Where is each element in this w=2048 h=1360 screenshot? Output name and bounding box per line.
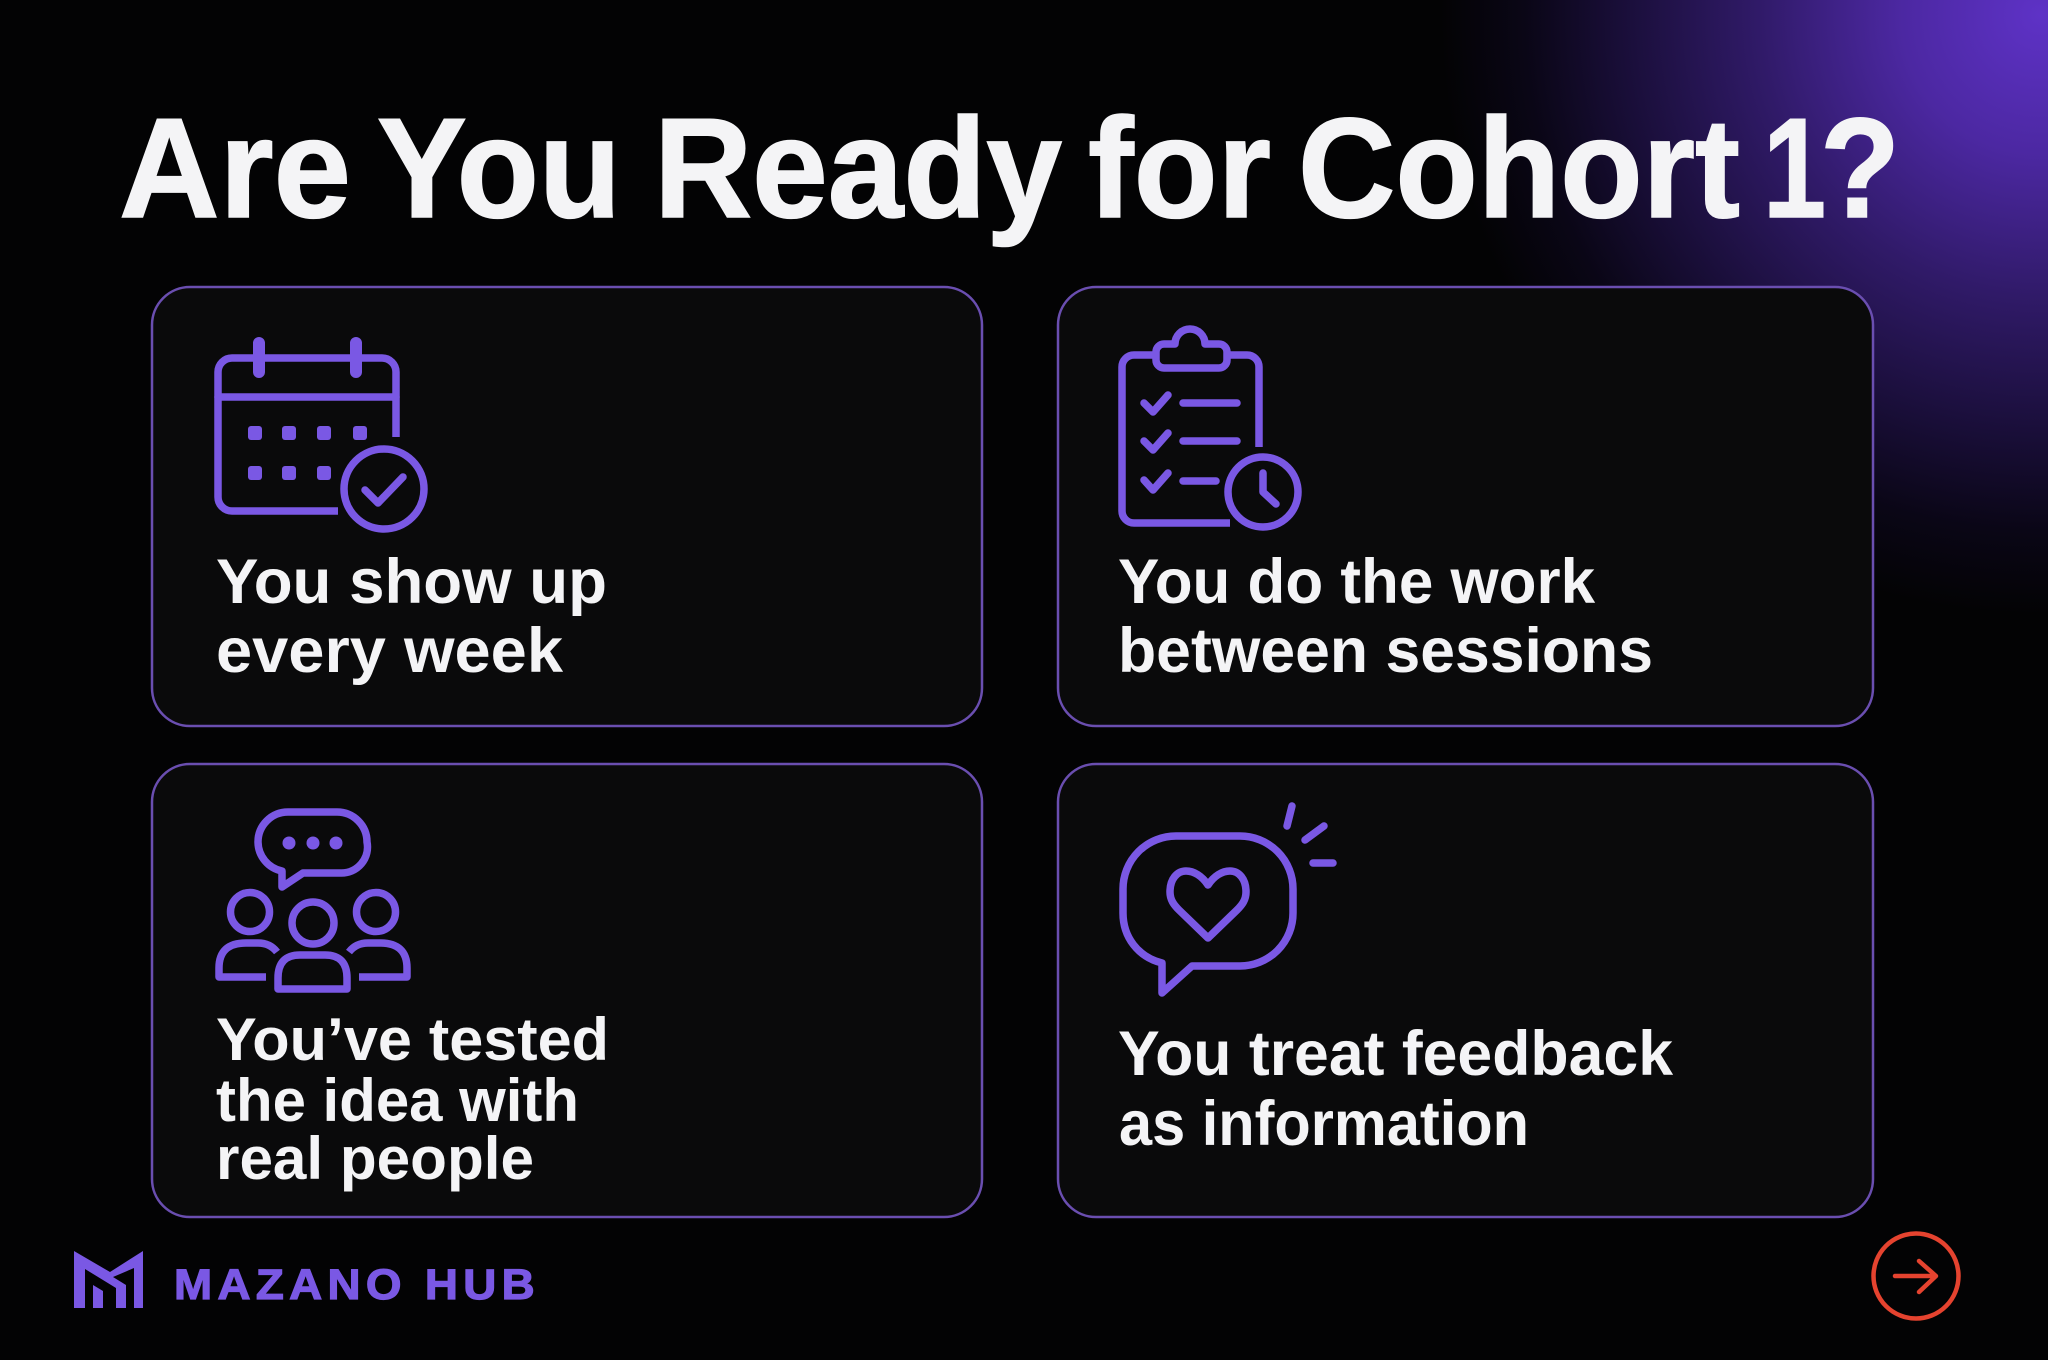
text: every week: every week	[216, 616, 564, 686]
wordmark: MAZANO HUB	[174, 1261, 540, 1309]
title: You	[377, 89, 621, 248]
panel: do the work	[1058, 287, 1873, 726]
title: Cohort	[1298, 89, 1740, 248]
title: ?	[1820, 89, 1900, 248]
logo: Mazano Hub	[74, 1251, 540, 1309]
text: treat feedback: You treat feedback	[1118, 1019, 1674, 1089]
text: idea with: the idea with	[216, 1067, 579, 1134]
text: do the work: You do the work	[1118, 547, 1596, 617]
icon: group with speech bubble	[219, 812, 407, 989]
title	[119, 89, 1900, 248]
arrow button	[1874, 1234, 1958, 1318]
text: as information: as information	[1119, 1089, 1529, 1159]
title: 1	[1763, 89, 1826, 248]
panel: treat feedback	[1058, 764, 1873, 1217]
icon: clipboard with clock	[1122, 329, 1298, 527]
title: Ready	[654, 89, 1062, 248]
panel: show up every week	[152, 287, 982, 726]
icon: calendar with check	[218, 343, 424, 529]
title: for	[1088, 89, 1271, 248]
text: tested: You’ve tested	[216, 1006, 609, 1073]
text: real people: real people	[216, 1125, 534, 1192]
text: between sessions: between sessions	[1118, 616, 1653, 686]
panel: tested the idea	[152, 764, 982, 1217]
title: Are	[119, 89, 351, 248]
logo mark	[74, 1251, 143, 1308]
text: show up: You show up	[216, 547, 607, 617]
icon: speech bubble with heart	[1123, 806, 1333, 993]
